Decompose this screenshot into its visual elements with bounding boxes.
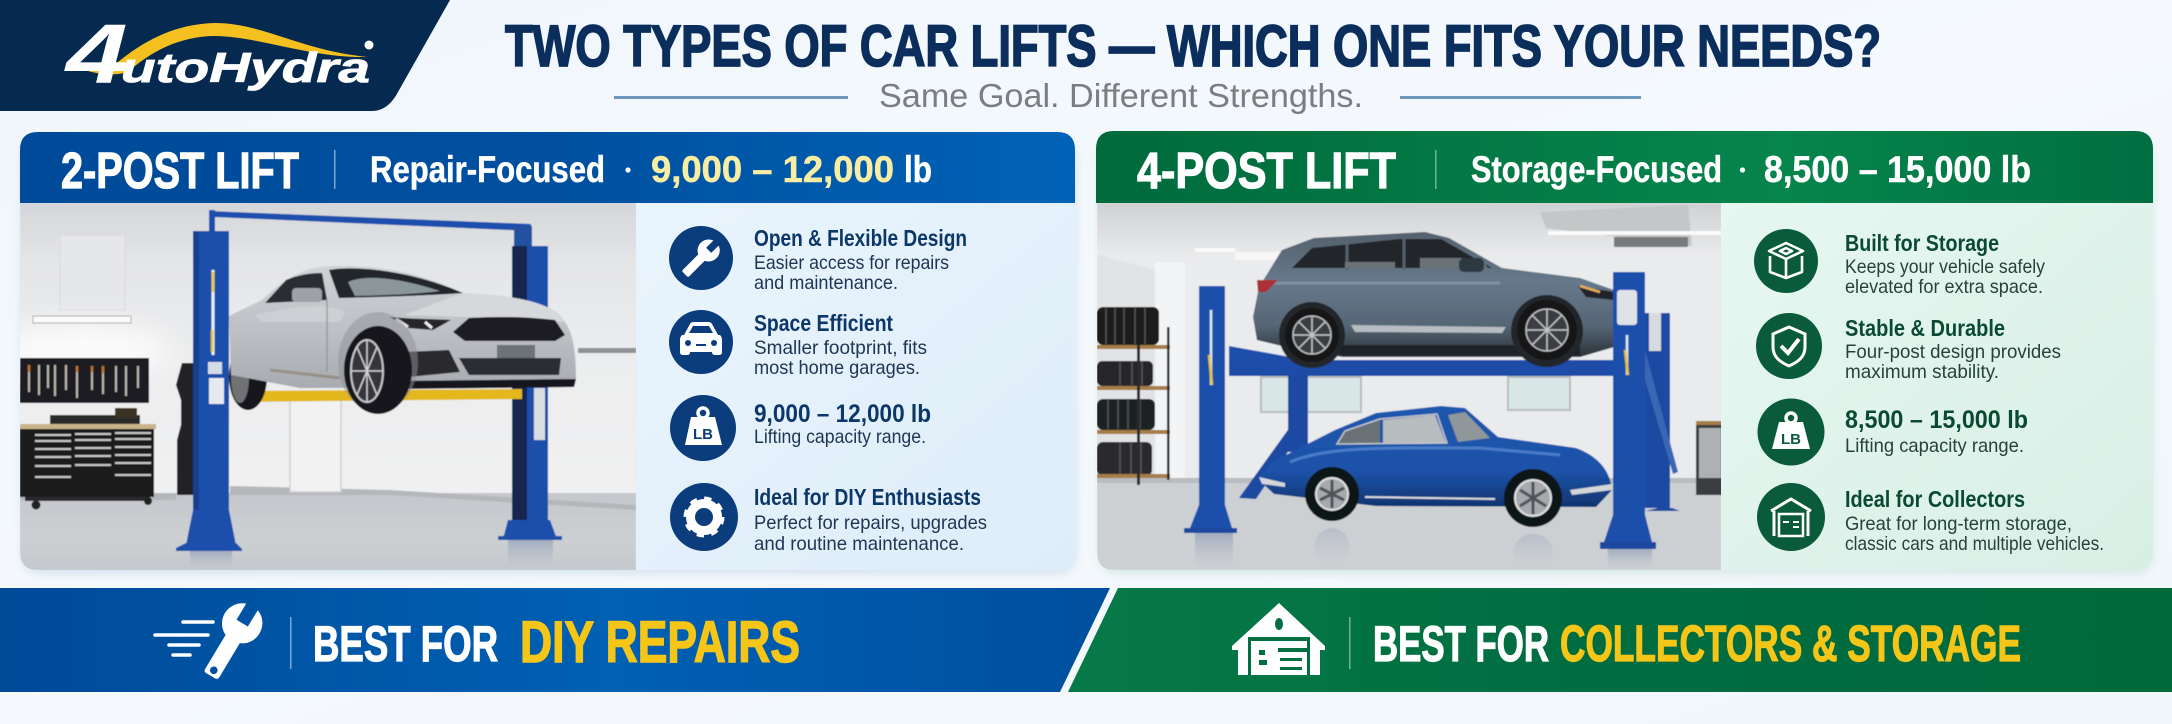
feature: Built for Storage <box>1754 229 2045 298</box>
feature: capacity 8,500-15,000 lb: Lifting capacity range. <box>1845 435 2024 457</box>
feature: Ideal for Collectors: classic cars and multiple vehicles. <box>1845 533 2104 555</box>
workbench <box>1696 421 1722 495</box>
feature: capacity 9,000-12,000 lb: 9,000 – 12,000 lb <box>754 400 931 428</box>
pegboard with tools <box>20 358 149 403</box>
feature: Built for Storage: Built for Storage <box>1845 230 1999 256</box>
icon: wrench with speed lines <box>155 599 273 681</box>
banner text: DIY repairs: BEST FOR <box>313 616 498 672</box>
panel: 2-post lift <box>0 132 1076 574</box>
lift runway <box>1229 346 1613 376</box>
logo panel <box>0 0 450 111</box>
blue classic car <box>1259 406 1612 527</box>
hydraulic unit <box>176 363 193 495</box>
silver coupe <box>229 266 576 412</box>
feature: Built for Storage: Keeps your vehicle safely <box>1845 256 2045 278</box>
info panel: 4-post <box>1721 203 2153 570</box>
feature: Open & Flexible Design <box>669 225 967 294</box>
wall fixture <box>578 348 636 353</box>
feature: Space Efficient: most home garages. <box>754 357 920 379</box>
banner text: collectors and storage: BEST FOR <box>1373 616 1549 672</box>
far post with beam <box>209 210 562 570</box>
banner: best for DIY repairs <box>0 588 1110 692</box>
feature: Space Efficient: Smaller footprint, fits <box>754 337 927 359</box>
feature: Stable & Durable: Four-post design provides <box>1845 341 2061 363</box>
banner text: collectors and storage <box>1373 615 2021 672</box>
feature: Ideal for DIY Enthusiasts <box>670 483 987 555</box>
feature: Stable & Durable: maximum stability. <box>1845 361 1999 383</box>
header: 2-post lift: lb <box>904 149 932 190</box>
feature: Ideal for DIY Enthusiasts: Perfect for repairs, upgrades <box>754 512 987 534</box>
panel: 4-post lift <box>1096 131 2153 574</box>
feature: Stable & Durable <box>1756 313 2061 383</box>
ceiling light <box>33 316 131 323</box>
feature: Open & Flexible Design: Open & Flexible Design <box>754 225 967 251</box>
feature: Open & Flexible Design: and maintenance. <box>754 272 898 294</box>
windows <box>1261 377 1361 412</box>
feature: capacity 8,500-15,000 lb: 8,500 – 15,000 lb <box>1845 406 2028 434</box>
tire rack <box>1097 307 1170 485</box>
logo: AutoHydra <box>63 7 373 101</box>
logo: AutoHydra: 4 <box>63 7 128 101</box>
header: 4-post lift: Storage-Focused <box>1471 149 1722 190</box>
info panel: 2-post <box>636 203 1076 570</box>
feature: capacity 9,000-12,000 lb: Lifting capacity range. <box>754 426 926 448</box>
grey SUV <box>1253 232 1614 368</box>
feature: Stable & Durable: Stable & Durable <box>1845 315 2005 341</box>
header: 2-post lift: 2-POST LIFT <box>61 142 299 199</box>
rear tyre <box>228 364 268 411</box>
banner text: DIY repairs <box>313 610 800 675</box>
subtitle: Same Goal. Different Strengths. <box>879 77 1363 114</box>
logo: AutoHydra: utoHydra <box>121 44 370 91</box>
header: 2-post lift <box>20 132 1075 203</box>
yellow arms <box>235 389 522 402</box>
subtitle <box>614 77 1641 114</box>
icon: garage <box>1232 603 1325 675</box>
feature: Open & Flexible Design: Easier access for repairs <box>754 252 949 274</box>
banner: best for collectors and storage <box>1068 588 2172 692</box>
rear posts and ramps <box>1239 313 1680 511</box>
tool cabinet <box>20 408 156 510</box>
feature: Space Efficient: Space Efficient <box>754 310 893 336</box>
header: 2-post lift: 9,000 – 12,000 <box>651 149 894 190</box>
feature: Ideal for DIY Enthusiasts: Ideal for DIY Enthusiasts <box>754 484 981 510</box>
feature: Space Efficient <box>669 310 927 379</box>
feature: Ideal for DIY Enthusiasts: and routine maintenance. <box>754 533 964 555</box>
front posts <box>1184 272 1656 549</box>
feature: capacity 9,000-12,000 lb: LB <box>693 426 713 443</box>
feature: capacity 9,000-12,000 lb <box>670 395 931 461</box>
feature: Ideal for Collectors <box>1757 483 2104 555</box>
photo: two-post lift with silver coupe <box>0 203 636 570</box>
header: 4-post lift <box>1096 131 2153 203</box>
feature: Ideal for Collectors: Ideal for Collectors <box>1845 486 2025 512</box>
feature: capacity 8,500-15,000 lb <box>1758 398 2028 466</box>
header: 4-post lift: 8,500 – 15,000 lb <box>1764 149 2031 190</box>
header: 4-post lift: 4-POST LIFT <box>1137 142 1396 199</box>
feature: Built for Storage: elevated for extra space. <box>1845 276 2043 298</box>
garage door <box>290 400 341 492</box>
floor reflections <box>1194 528 1652 562</box>
photo: four-post lift with SUV and classic car <box>1097 203 1722 570</box>
feature: capacity 8,500-15,000 lb: LB <box>1781 431 1801 448</box>
near post <box>176 231 242 570</box>
banner text: DIY repairs: DIY REPAIRS <box>520 610 800 675</box>
front wheel <box>344 326 412 414</box>
feature: Ideal for Collectors: Great for long-term storage, <box>1845 513 2072 535</box>
header: 2-post lift: Repair-Focused <box>370 149 605 190</box>
